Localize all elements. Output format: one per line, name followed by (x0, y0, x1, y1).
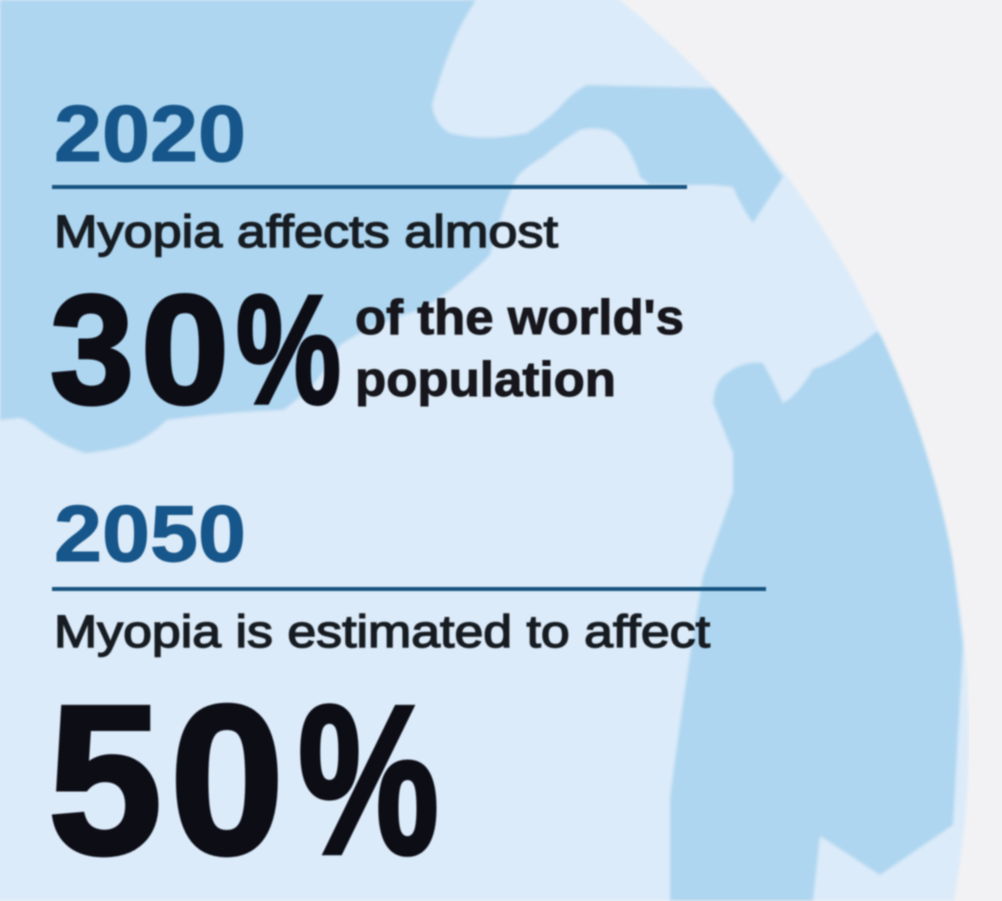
stat: 50%: 0 (170, 661, 284, 898)
stat: 50%: % (298, 661, 439, 898)
land: right continent (670, 331, 963, 901)
stat: 30% (50, 263, 341, 436)
text content (48, 89, 766, 898)
stat: 30%: 0 (141, 263, 229, 436)
stat: 50% (48, 661, 439, 898)
block: 2050 (48, 489, 766, 898)
label: myopia is estimated to affect: Myopia is estimated to affect (54, 606, 711, 657)
block: 2020 (50, 89, 687, 436)
rule 2020 (52, 185, 687, 189)
year 2020: 2020 (54, 89, 246, 178)
label: myopia affects almost: Myopia affects almost (54, 206, 559, 257)
label: of the world's population: population (355, 353, 616, 407)
land: upper left continent (0, 0, 783, 453)
stat: 30%: 3 (50, 263, 134, 436)
stat: 30%: % (236, 263, 341, 436)
year 2050: 2050 (54, 489, 246, 578)
stat: 50%: 5 (48, 661, 162, 898)
label: of the world's population (355, 291, 684, 407)
label: of the world's population: of the world's (355, 291, 684, 345)
rule 2050 (52, 587, 766, 591)
